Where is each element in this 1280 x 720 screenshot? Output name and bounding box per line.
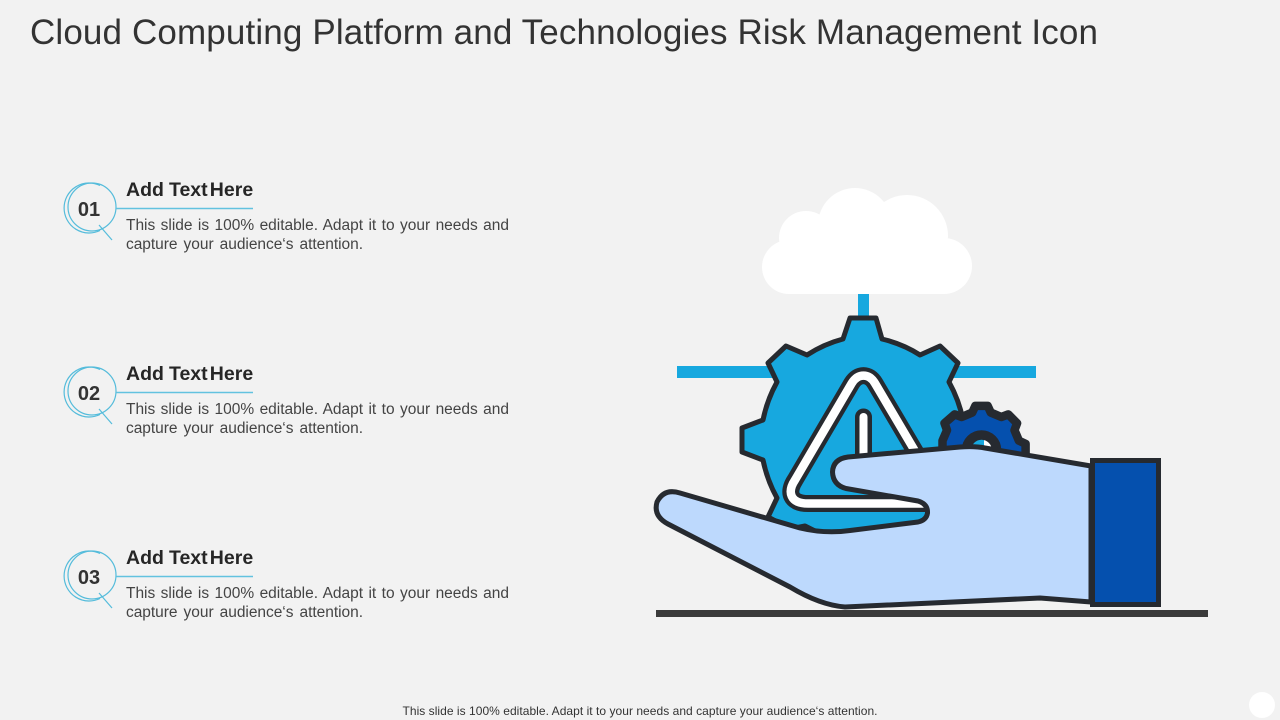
corner badge	[1249, 692, 1275, 718]
heading: item 03: Text	[169, 547, 213, 569]
text block: item 03: This slide is 100% editable. Adapt it to your needs and	[126, 585, 509, 602]
icon: number badge 01	[64, 183, 116, 240]
footer note: This slide is 100% editable. Adapt it to your needs and capture your audience‘s attention.	[402, 704, 878, 718]
text block: item 03	[126, 585, 509, 621]
text block: item 02	[126, 401, 509, 437]
text block: item 02: This slide is 100% editable. Adapt it to your needs and	[126, 401, 509, 418]
icon: cloud	[762, 188, 972, 294]
icon: large gear	[742, 318, 985, 540]
icon: number badge 03	[64, 551, 116, 608]
icon: small gear	[942, 406, 1026, 490]
heading: item 01: Add	[126, 179, 169, 201]
heading: item 02: Add	[126, 363, 169, 385]
icon: number badge 02	[64, 367, 116, 424]
heading: item 02: Text	[169, 363, 213, 385]
text block: item 01	[126, 217, 509, 253]
heading: item 01: Text	[169, 179, 213, 201]
text block: item 01: capture your audience‘s attention.	[126, 236, 363, 253]
icon: sleeve cuff	[1092, 460, 1158, 604]
title: Cloud Computing Platform and Technologies Risk Management Icon	[30, 13, 1098, 52]
panel: item 02	[64, 363, 509, 437]
panel: item 03	[64, 547, 509, 621]
illustration: hand holding cloud risk gear	[656, 188, 1208, 617]
icon: number badge 01: 01	[78, 199, 100, 221]
heading: item 03: Here	[210, 547, 253, 569]
heading: item 01: Here	[210, 179, 253, 201]
icon: warning triangle	[791, 376, 935, 504]
icon: number badge 03: 03	[78, 567, 100, 589]
panel: item 01	[64, 179, 509, 253]
icon: hand	[656, 447, 1091, 607]
text block: item 01: This slide is 100% editable. Adapt it to your needs and	[126, 217, 509, 234]
icon: number badge 02: 02	[78, 383, 100, 405]
ground line	[656, 610, 1208, 617]
text block: item 02: capture your audience‘s attention.	[126, 420, 363, 437]
text block: item 03: capture your audience‘s attention.	[126, 604, 363, 621]
connector lines	[677, 294, 1036, 378]
heading: item 02: Here	[210, 363, 253, 385]
heading: item 03: Add	[126, 547, 169, 569]
